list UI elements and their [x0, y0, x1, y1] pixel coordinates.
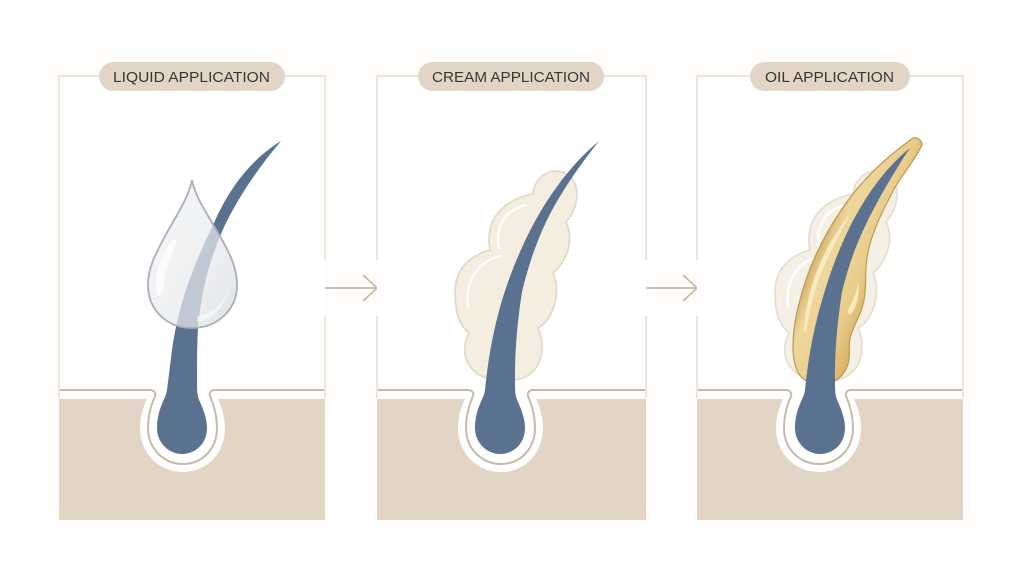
label pill: [99, 62, 285, 91]
follicle outline: [378, 390, 645, 464]
panel: oil application: [697, 62, 963, 520]
hair strand: [157, 141, 281, 454]
oil coating: [793, 138, 922, 381]
water drop: [148, 180, 237, 328]
hair strand: [795, 148, 910, 454]
skin layer: [377, 399, 646, 520]
panel: cream application: [377, 62, 646, 520]
follicle outline: [60, 390, 324, 464]
arrow: liquid to cream: [325, 275, 377, 301]
arrow: cream to oil: [646, 275, 697, 301]
label pill: OIL APPLICATION: [765, 69, 894, 86]
label pill: [750, 62, 910, 91]
skin layer: [59, 399, 325, 520]
panel: liquid application: [59, 62, 325, 520]
label pill: [418, 62, 604, 91]
follicle outline: [698, 390, 962, 464]
label pill: CREAM APPLICATION: [432, 69, 590, 86]
cream blob: [775, 171, 897, 380]
skin layer: [697, 399, 963, 520]
hair strand: [475, 141, 599, 454]
cream blob: [455, 171, 577, 380]
label pill: LIQUID APPLICATION: [113, 69, 270, 86]
